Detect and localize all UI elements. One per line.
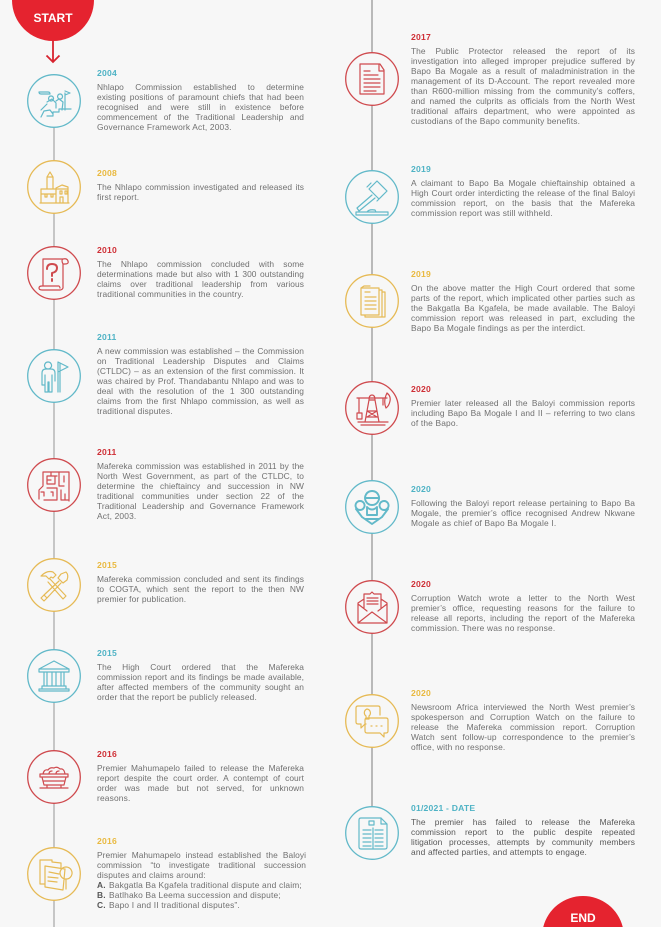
- arrow: start to first event: [46, 41, 60, 64]
- text: 2020 letter: [411, 579, 635, 633]
- text: 2017: The Public Protector released the report of its: [411, 46, 635, 56]
- text: 2020 reports released: [411, 384, 635, 428]
- text: 2015 High Court: The High Court ordered that the Mafereka: [97, 662, 304, 672]
- text: 2020 letter: release all reports, including the report of the Mafereka: [411, 613, 635, 623]
- text: 2010: [97, 245, 304, 299]
- text: 01/2021 to date: and affected parties, and attempts to engage.: [411, 847, 587, 857]
- text: 2016 Baloyi: disputes and claims around:: [97, 870, 206, 880]
- text: 2019 High Court: On the above matter the High Court ordered that some: [411, 283, 635, 293]
- event: 01/2021 to date: [345, 803, 635, 860]
- text: 2019 High Court: the Bakgatla Ba Kgafela, be made available. The Baloyi: [411, 303, 635, 313]
- text: 2020 letter: 2020: [411, 579, 431, 589]
- event: 2008: [27, 160, 304, 214]
- event: 2010: [27, 245, 304, 300]
- text: 2011 new commission: 2011: [97, 332, 116, 342]
- text: 01/2021 to date: commission report to the public despite repeated: [411, 827, 635, 837]
- text: 2016 Baloyi: [97, 836, 306, 910]
- icon: people climbing to flag: [27, 74, 81, 128]
- text: 01/2021 to date: [411, 803, 635, 857]
- text: 2020 Newsroom Africa: release the Mafereka commission report. Corruption: [411, 722, 635, 732]
- text: 2011 Mafereka: [97, 447, 304, 521]
- text: 2015 COGTA: 2015: [97, 560, 117, 570]
- text: 2020 reports released: Premier later released all the Baloyi commission reports: [411, 398, 635, 408]
- text: 2019 claimant: A claimant to Bapo Ba Mogale chieftainship obtained a: [411, 178, 635, 188]
- text: 2016 Baloyi: A.: [97, 880, 106, 890]
- event: 2020 chief recognised: [345, 480, 635, 534]
- event: 2020 letter: [345, 579, 635, 634]
- text: 2016 Baloyi: commission “to investigate traditional succession: [97, 860, 306, 870]
- text: 2019 High Court: Bapo Ba Mogale findings as per the interdict.: [411, 323, 585, 333]
- event: 2011 new commission: [27, 332, 304, 416]
- text: 2015 High Court: 2015: [97, 648, 117, 658]
- text: 2020 chief recognised: Mogale, the premier’s office recognised Andrew Nkwane: [411, 508, 635, 518]
- event: 2016 contempt: [27, 749, 304, 804]
- text: 2011 new commission: was chaired by Prof. Thandabantu Nhlapo and was to: [97, 376, 304, 386]
- text: 2016 Baloyi: 2016: [97, 836, 117, 846]
- event: 2016 Baloyi: [27, 836, 306, 910]
- text: 2019 High Court: [411, 269, 635, 333]
- text: 2004: commencement of the Traditional Leadership and: [97, 112, 304, 122]
- text: 2011 Mafereka: Traditional Leadership and Governance Framework: [97, 501, 304, 511]
- text: 2015 COGTA: to COGTA, which sent the report to the then NW: [97, 584, 304, 594]
- text: 2020 Newsroom Africa: Newsroom Africa interviewed the North West premier’s: [411, 702, 635, 712]
- text: 01/2021 to date: The premier has failed to release the Mafereka: [411, 817, 635, 827]
- text: 2011 new commission: A new commission was established – the Commission: [97, 346, 304, 356]
- icon: open envelope: [345, 580, 399, 634]
- event: 2015 COGTA: [27, 558, 304, 612]
- start badge: [12, 0, 94, 41]
- icon: documents with magnifier: [27, 847, 81, 901]
- text: 2020 Newsroom Africa: 2020: [411, 688, 431, 698]
- text: 2016 contempt: [97, 749, 304, 803]
- text: 2017: than R600-million missing from the community’s coffers,: [411, 86, 635, 96]
- text: 2016 contempt: 2016: [97, 749, 117, 759]
- text: 2004: Nhlapo Commission established to determine: [97, 82, 304, 92]
- text: 2015 COGTA: Mafereka commission concluded and sent its findings: [97, 574, 304, 584]
- icon: crossed hammer and shovel: [27, 558, 81, 612]
- text: 2010: traditional communities in the country.: [97, 289, 244, 299]
- text: 2017: traditional affairs department, who were appointed as: [411, 106, 635, 116]
- text: 2016 contempt: order was made but not served, for unknown: [97, 783, 304, 793]
- text: 2011 new commission: (CTLDC) – as an extension of the first commission. It: [97, 366, 304, 376]
- text: 2019 claimant: commission report was still withheld.: [411, 208, 553, 218]
- text: 2004: Governance Framework Act, 2003.: [97, 122, 232, 132]
- text: 2008: 2008: [97, 168, 117, 178]
- text: 2019 claimant: [411, 164, 635, 218]
- text: 2015 High Court: [97, 648, 304, 702]
- text: 2020 chief recognised: Following the Baloyi report release pertaining to Bapo Ba: [411, 498, 635, 508]
- icon: people around chief: [345, 480, 399, 534]
- text: 2020 reports released: 2020: [411, 384, 431, 394]
- text: 2016 contempt: Premier Mahumapelo failed to release the Mafereka: [97, 763, 304, 773]
- text: 2020 letter: premier’s office, requesting reasons for the failure to: [411, 603, 635, 613]
- text: 2017: investigation into alleged improper prejudice suffered by: [411, 56, 635, 66]
- text: 2011 Mafereka: North West Government, as part of the CTLDC, to: [97, 471, 304, 481]
- text: 2020 chief recognised: 2020: [411, 484, 431, 494]
- text: 2020 letter: commission. There was no response.: [411, 623, 555, 633]
- text: 2015 COGTA: premier for publication.: [97, 594, 186, 604]
- text: 2004: 2004: [97, 68, 117, 78]
- text: 2020 reports released: including Bapo Ba Mogale I and II – referring to two clans: [411, 408, 635, 418]
- text: 2011 new commission: on Traditional Leadership Disputes and Claims: [97, 356, 304, 366]
- text: 2015 High Court: order that the report be publicly released.: [97, 692, 257, 702]
- icon: speech bubbles: [345, 694, 399, 748]
- end badge: [542, 896, 624, 927]
- text: 2020 reports released: of the Bapo.: [411, 418, 458, 428]
- text: 2017: management of its D-Account. The report revealed more: [411, 76, 635, 86]
- text: 2008: [97, 168, 304, 202]
- event: 2020 Newsroom Africa: [345, 688, 635, 752]
- event: 2011 Mafereka: [27, 447, 304, 521]
- icon: person with flag: [27, 349, 81, 403]
- icon: mining cart: [27, 750, 81, 804]
- start badge: START: [33, 11, 73, 25]
- text: 2017: [411, 32, 635, 126]
- text: 2016 Baloyi: Batlhako Ba Leema succession and dispute;: [109, 890, 281, 900]
- text: 2019 claimant: High Court order interdicting the release of the final Baloyi: [411, 188, 635, 198]
- icon: gavel: [345, 170, 399, 224]
- text: 2011 Mafereka: Mafereka commission was established in 2011 by the: [97, 461, 304, 471]
- icon: scroll with question mark: [27, 246, 81, 300]
- text: 2016 Baloyi: C.: [97, 900, 106, 910]
- text: 2017: and named the culprits as officials from the North West: [411, 96, 635, 106]
- text: 2011 Mafereka: traditional communities under section 22 of the: [97, 491, 304, 501]
- icon: court building: [27, 649, 81, 703]
- event: 2017: [345, 32, 635, 126]
- text: 2020 chief recognised: Mogale as chief of Bapo Ba Mogale I.: [411, 518, 556, 528]
- text: 2016 Baloyi: Bapo I and II traditional disputes”.: [109, 900, 240, 910]
- text: 2011 new commission: claims from the first Nhlapo commission, as well as: [97, 396, 304, 406]
- icon: castle buildings: [27, 160, 81, 214]
- text: 2019 High Court: commission report was released in part, excluding the: [411, 313, 635, 323]
- text: 2011 Mafereka: determine the chieftaincy and succession in NW: [97, 481, 304, 491]
- text: 2015 COGTA: [97, 560, 304, 604]
- text: 01/2021 to date: 01/2021 - DATE: [411, 803, 475, 813]
- text: 2004: existing positions of paramount chiefs that had been: [97, 92, 304, 102]
- event: 2019 High Court: [345, 269, 635, 333]
- text: 01/2021 to date: litigation processes, attempts by community members: [411, 837, 635, 847]
- text: 2016 Baloyi: Premier Mahumapelo instead established the Baloyi: [97, 850, 306, 860]
- text: 2010: 2010: [97, 245, 117, 255]
- icon: stacked papers: [345, 274, 399, 328]
- text: 2015 High Court: after affected members of the community sought an: [97, 682, 304, 692]
- icon: mining tower: [345, 381, 399, 435]
- text: 2004: [97, 68, 304, 132]
- text: 2019 High Court: parts of the report, which implicated other parties such as: [411, 293, 635, 303]
- end badge: END: [570, 911, 596, 925]
- icon: maze map: [27, 458, 81, 512]
- text: 2020 Newsroom Africa: [411, 688, 635, 752]
- text: 2016 contempt: report despite the court order. A contempt of court: [97, 773, 304, 783]
- text: 2004: recognised and were still in existence before: [97, 102, 304, 112]
- text: 2010: determinations made but also with 1 300 outstanding: [97, 269, 304, 279]
- text: 2020 chief recognised: [411, 484, 635, 528]
- text: 2008: The Nhlapo commission investigated and released its: [97, 182, 304, 192]
- event: 2004: [27, 68, 304, 132]
- text: 2019 claimant: commission report, on the basis that the Mafereka: [411, 198, 635, 208]
- text: 2008: first report.: [97, 192, 139, 202]
- text: 2017: 2017: [411, 32, 431, 42]
- text: 2017: custodians of the Bapo community benefits.: [411, 116, 580, 126]
- text: 2019 High Court: 2019: [411, 269, 431, 279]
- text: 2020 Newsroom Africa: Watch sent follow-up correspondence to the premier’s: [411, 732, 635, 742]
- text: 2017: Bapo Ba Mogale as a result of maladministration in the: [411, 66, 635, 76]
- text: 2011 Mafereka: Act, 2003.: [97, 511, 136, 521]
- text: 2010: claims over traditional leadership from various: [97, 279, 304, 289]
- event: 2015 High Court: [27, 648, 304, 703]
- icon: data sheet: [345, 806, 399, 860]
- event: 2019 claimant: [345, 164, 635, 224]
- text: 2016 Baloyi: Bakgatla Ba Kgafela traditional dispute and claim;: [109, 880, 302, 890]
- icon: report document: [345, 52, 399, 106]
- text: 2015 High Court: commission report and its findings be made available,: [97, 672, 304, 682]
- text: 2020 letter: Corruption Watch wrote a letter to the North West: [411, 593, 635, 603]
- text: 2010: The Nhlapo commission concluded with some: [97, 259, 304, 269]
- text: 2020 Newsroom Africa: office, with no response.: [411, 742, 505, 752]
- text: 2016 Baloyi: B.: [97, 890, 106, 900]
- text: 2016 contempt: reasons.: [97, 793, 130, 803]
- text: 2011 Mafereka: 2011: [97, 447, 116, 457]
- text: 2011 new commission: deal with the resolution of the 1 300 outstanding: [97, 386, 304, 396]
- text: 2011 new commission: traditional disputes.: [97, 406, 173, 416]
- text: 2011 new commission: [97, 332, 304, 416]
- text: 2019 claimant: 2019: [411, 164, 431, 174]
- event: 2020 reports released: [345, 381, 635, 435]
- text: 2020 Newsroom Africa: spokesperson and Corruption Watch on the failure to: [411, 712, 635, 722]
